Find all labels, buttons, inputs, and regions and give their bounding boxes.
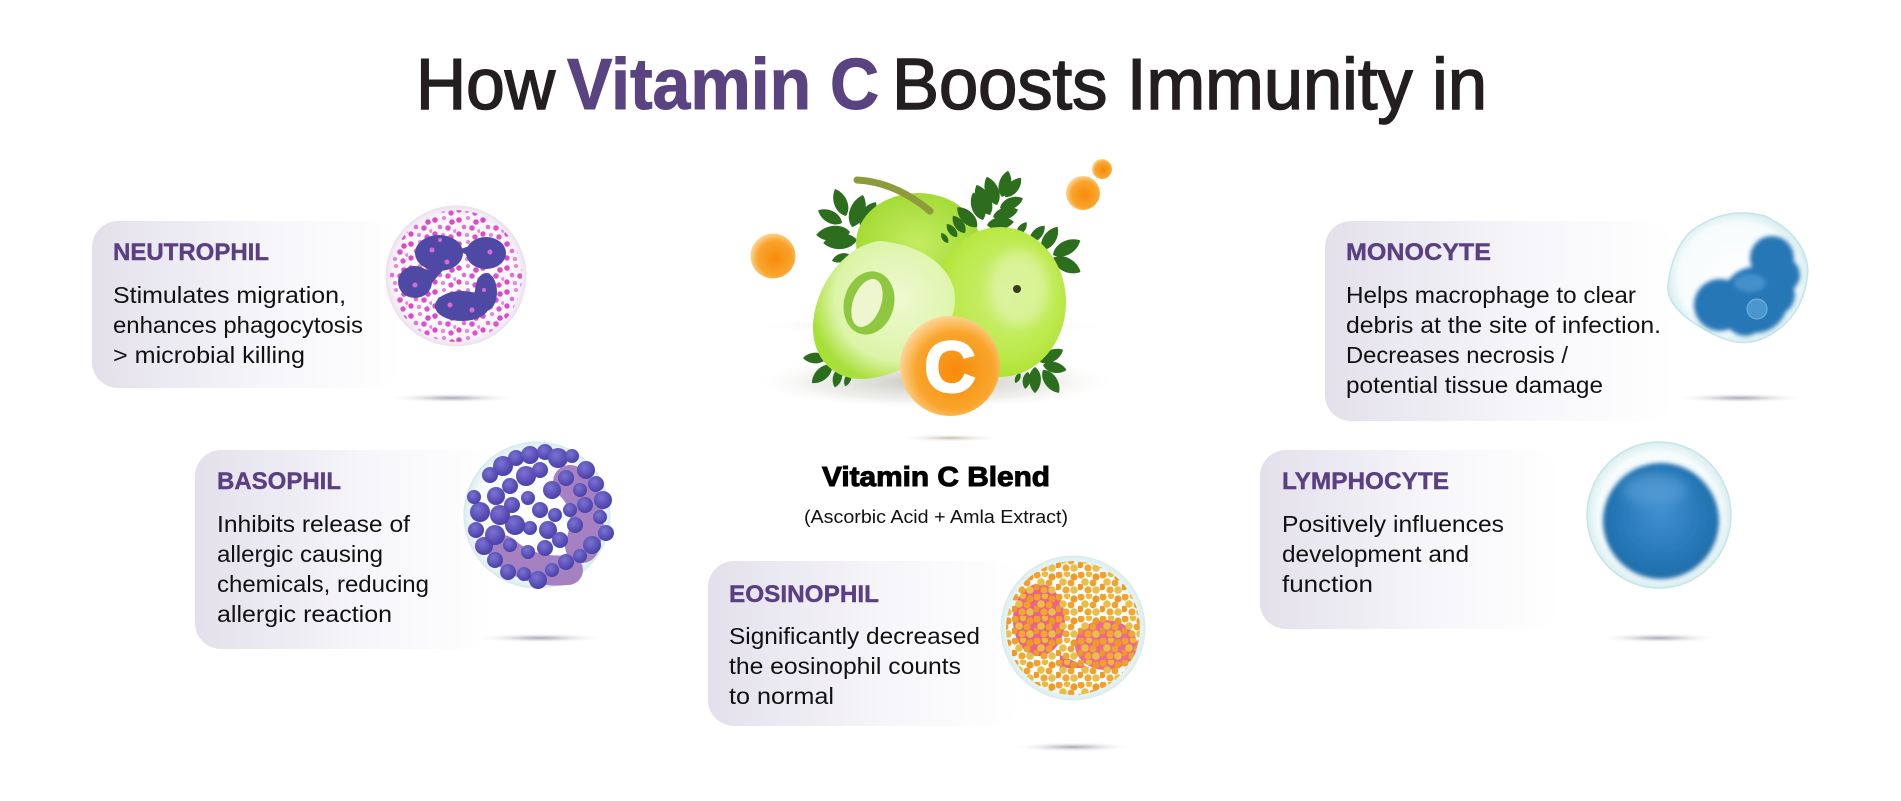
icon: neutrophil cell [386, 206, 526, 346]
stem [857, 180, 930, 211]
back fruit [856, 193, 980, 293]
text: lymphocyte description: development and [1282, 541, 1469, 567]
heading: lymphocyte: LYMPHOCYTE [1282, 468, 1449, 495]
leaves [803, 169, 1084, 396]
halved fruit [813, 241, 955, 379]
text: blend ingredients: (Ascorbic Acid + Amla Extract) [804, 507, 1068, 527]
text: eosinophil description [729, 623, 980, 709]
heading: vitamin C blend: Vitamin C Blend [822, 461, 1050, 492]
heading: basophil: BASOPHIL [217, 468, 341, 495]
text: neutrophil description: > microbial killing [113, 342, 305, 368]
text: eosinophil description: to normal [729, 683, 834, 709]
shadow: eosinophil [1011, 742, 1135, 752]
text: monocyte description: Decreases necrosis / [1346, 342, 1569, 368]
middle leaves [939, 203, 981, 245]
text: lymphocyte description: function [1282, 571, 1373, 597]
title: Boosts Immunity in [892, 45, 1487, 125]
heading: neutrophil: NEUTROPHIL [113, 239, 269, 266]
text: basophil description: allergic reaction [217, 601, 392, 627]
text: eosinophil description: the eosinophil counts [729, 653, 961, 679]
text: basophil description [217, 511, 429, 627]
icon: lymphocyte cell [1587, 442, 1731, 588]
text: neutrophil description: Stimulates migration, [113, 282, 346, 308]
shadow: basophil [474, 633, 606, 643]
text: basophil description: Inhibits release of [217, 511, 411, 537]
text: monocyte description: Helps macrophage to clear [1346, 282, 1636, 308]
text: monocyte description: debris at the site of infection. [1346, 312, 1661, 338]
heading: monocyte: MONOCYTE [1346, 239, 1491, 266]
title: How [416, 45, 556, 125]
panel: monocyte [1325, 213, 1808, 421]
icon: eosinophil cell [1001, 556, 1145, 700]
heading: eosinophil: EOSINOPHIL [729, 581, 879, 608]
text: monocyte description [1346, 282, 1661, 398]
panel: lymphocyte [1260, 442, 1731, 643]
text: lymphocyte description [1282, 511, 1504, 597]
text: neutrophil description [113, 282, 363, 368]
panel: eosinophil [708, 556, 1145, 752]
shadow: monocyte [1674, 393, 1806, 403]
icon: basophil cell [464, 442, 614, 589]
ground shadows [748, 317, 1120, 442]
panel: basophil [195, 442, 614, 649]
infographic [92, 56, 1809, 750]
text: neutrophil description: enhances phagocytosis [113, 312, 363, 338]
right fruit [934, 227, 1066, 377]
text: basophil description: chemicals, reducing [217, 571, 429, 597]
vitamin C ball [900, 316, 1000, 416]
shadow: lymphocyte [1597, 633, 1721, 643]
title [416, 45, 1487, 125]
text: basophil description: allergic causing [217, 541, 383, 567]
text: lymphocyte description: Positively influences [1282, 511, 1504, 537]
panel: neutrophil [92, 206, 526, 403]
title: Vitamin C [567, 45, 879, 125]
icon: monocyte cell [1668, 213, 1808, 342]
orange spheres [750, 159, 1112, 278]
illustration: amla fruit with vitamin C [748, 159, 1120, 442]
text: monocyte description: potential tissue damage [1346, 372, 1603, 398]
vitamin C ball: C [924, 328, 976, 408]
shadow: neutrophil [386, 393, 518, 403]
text: eosinophil description: Significantly decreased [729, 623, 980, 649]
